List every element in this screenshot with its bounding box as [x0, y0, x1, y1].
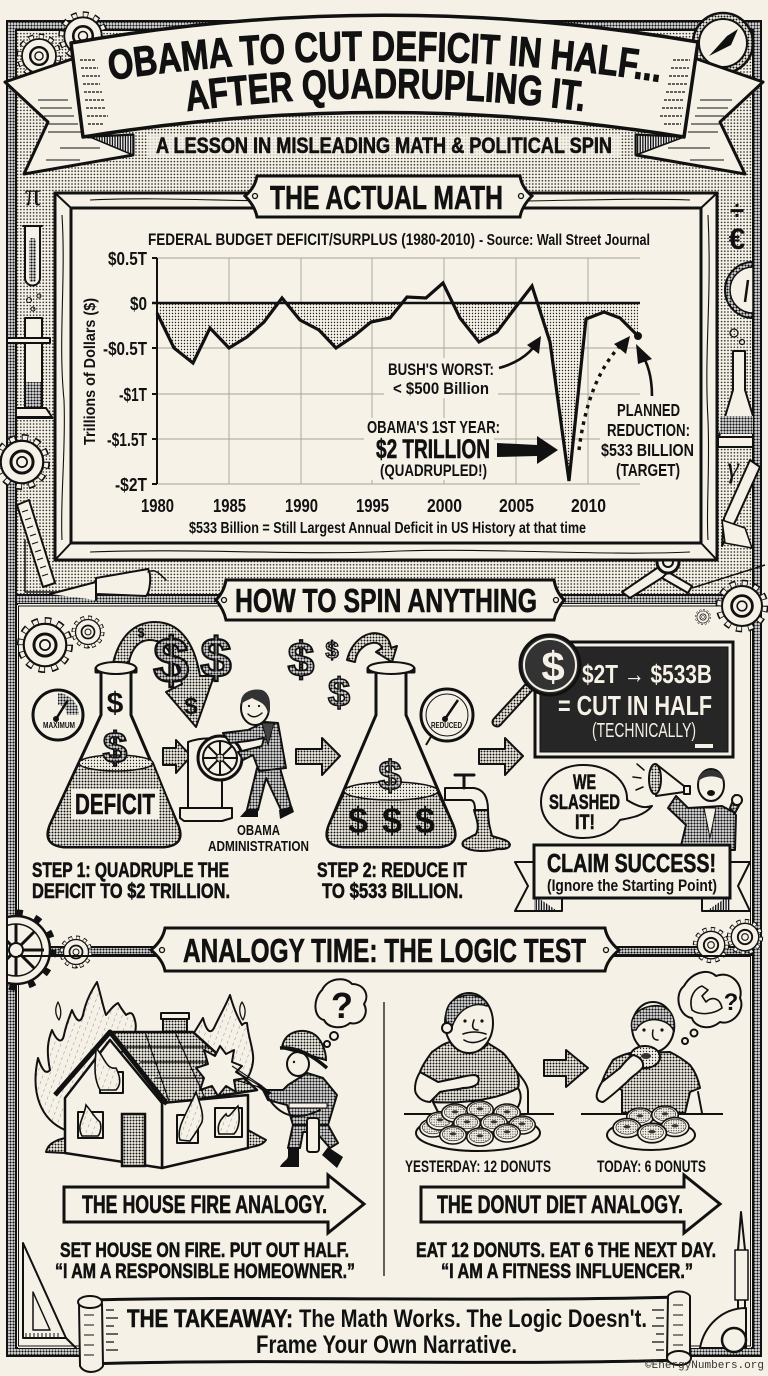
- donut diet caption: [416, 1239, 716, 1283]
- takeaway text: THE TAKEAWAY:: [127, 1305, 293, 1333]
- house fire caption: SET HOUSE ON FIRE. PUT OUT HALF.: [60, 1239, 349, 1262]
- y axis labels: -$1.5T: [107, 430, 147, 450]
- water spray lines: [232, 1066, 262, 1088]
- pi symbol: π: [25, 176, 41, 212]
- big corner gear wheel: [0, 913, 53, 987]
- arrow: the house fire analogy: THE HOUSE FIRE ANALOGY.: [82, 1191, 327, 1219]
- x axis labels: 1995: [356, 496, 389, 516]
- callout: obama's first year: OBAMA'S 1ST YEAR:: [367, 417, 500, 437]
- megaphone man: [633, 764, 742, 850]
- right scroll roll: [667, 1292, 691, 1365]
- y axis labels: [103, 249, 147, 495]
- half gear: [0, 439, 45, 485]
- flames right of house: [178, 995, 253, 1082]
- roof shingle lines: [125, 1032, 240, 1104]
- title line 1: OBAMA TO CUT DEFICIT IN HALF...: [108, 31, 660, 82]
- x axis labels: 2010: [571, 496, 606, 516]
- test tube: [23, 226, 42, 311]
- title line 2: AFTER QUADRUPLING IT.: [187, 68, 583, 112]
- banner main ribbon: [71, 15, 698, 137]
- decoration: right science column: [622, 195, 765, 628]
- side flask: [718, 329, 753, 447]
- tail hatching left: [38, 100, 100, 160]
- planned target dot: [634, 332, 642, 340]
- division sign: ÷: [730, 195, 744, 225]
- roof: [110, 1032, 257, 1104]
- y axis labels: -$0.5T: [103, 339, 147, 359]
- flying dollar signs left: $: [153, 624, 189, 696]
- pressure gauge: maximum: MAXIMUM: [43, 721, 75, 730]
- label: obama administration: [208, 822, 309, 855]
- test tool on shelf: [50, 569, 166, 600]
- house chimney: [161, 1013, 189, 1042]
- chart title: - Source: Wall Street Journal: [479, 232, 650, 249]
- bushes: [46, 1130, 266, 1153]
- callout: planned reduction: $533 BILLION: [601, 440, 694, 460]
- flying dollar signs left: $: [200, 626, 232, 689]
- house gable wall: [65, 1040, 162, 1168]
- house fire caption: “I AM A RESPONSIBLE HOMEOWNER.”: [55, 1260, 355, 1283]
- thought bubble with question mark: [315, 979, 366, 1047]
- callout: obama's first year: (QUADRUPLED!): [380, 461, 487, 480]
- claim success ribbon: [515, 845, 750, 911]
- step 1 text: STEP 1: QUADRUPLE THE: [32, 859, 229, 882]
- left scroll roll: [78, 1296, 103, 1372]
- y axis labels: -$2T: [115, 475, 147, 495]
- decoration: top left gears: [21, 16, 103, 74]
- flying dollar signs left: $: [184, 693, 198, 720]
- y axis title: Trillions of Dollars ($): [82, 298, 99, 445]
- y axis labels: $0.5T: [108, 249, 147, 269]
- side gauge: [725, 262, 753, 318]
- panel: donut diet analogy: [404, 972, 741, 1283]
- chalkboard: = CUT IN HALF: [558, 690, 712, 721]
- thin man eating: [597, 1002, 702, 1113]
- arrow: the donut diet analogy: [421, 1175, 720, 1233]
- ribbon hatching left: [80, 60, 108, 124]
- chalkboard: [535, 642, 733, 757]
- decoration: set square: [23, 1243, 76, 1348]
- step 2 text: TO $533 BILLION.: [322, 880, 463, 903]
- section heading: analogy time: ANALOGY TIME: THE LOGIC TEST: [183, 932, 586, 969]
- table line left: [404, 1113, 554, 1115]
- callout: planned reduction: REDUCTION:: [607, 420, 690, 440]
- title banner: [3, 14, 765, 176]
- valve pedestal: [180, 736, 242, 821]
- step 1 text: [32, 859, 230, 903]
- flask 2: reduced: $: [348, 800, 368, 841]
- decoration: left science column: [0, 176, 166, 600]
- water splash: [196, 1046, 246, 1096]
- speech bubble: we slashed it: IT!: [575, 811, 595, 834]
- banner left tail: [5, 58, 133, 174]
- x axis labels: 2005: [499, 496, 534, 516]
- x axis labels: 2000: [427, 496, 462, 516]
- donut labels: TODAY: 6 DONUTS: [597, 1158, 706, 1176]
- x axis labels: 1985: [213, 496, 246, 516]
- label: obama administration: ADMINISTRATION: [208, 838, 309, 855]
- callout: obama's first year: $2 TRILLION: [376, 434, 490, 464]
- takeaway scroll: [78, 1292, 691, 1372]
- drafting compass: [622, 551, 765, 598]
- section heading: analogy time: [0, 913, 760, 987]
- speech bubble: we slashed it: WE: [573, 771, 596, 794]
- arrow: the house fire analogy: [64, 1175, 364, 1233]
- gamma symbol: γ: [727, 451, 740, 484]
- claim success ribbon: CLAIM SUCCESS!: [547, 848, 716, 878]
- callout: planned reduction: [600, 344, 696, 480]
- label: obama administration: OBAMA: [237, 822, 280, 839]
- claim success ribbon: (Ignore the Starting Point): [547, 876, 717, 895]
- subtitle: A LESSON IN MISLEADING MATH & POLITICAL SPIN: [156, 133, 612, 158]
- table line right: [581, 1113, 723, 1115]
- flask 2: reduced: [327, 662, 455, 847]
- arrow to step 2: [296, 738, 340, 775]
- chart title: FEDERAL BUDGET DEFICIT/SURPLUS (1980-2010): [148, 230, 475, 249]
- takeaway message: The Math Works. The Logic Doesn't.: [299, 1305, 647, 1333]
- faucet and puddle: [445, 775, 510, 851]
- divider: [383, 1002, 385, 1276]
- stray flame licks: [56, 1002, 245, 1020]
- panel: house fire analogy: [36, 979, 366, 1283]
- callout: bush's worst: BUSH'S WORST:: [388, 360, 494, 379]
- euro sign: €: [729, 223, 746, 256]
- callout: bush's worst: [384, 336, 541, 398]
- pressure gauge: reduced: REDUCED: [431, 721, 462, 730]
- side gear: [720, 584, 764, 628]
- callout: planned reduction: PLANNED: [617, 400, 680, 420]
- section heading: the actual math: THE ACTUAL MATH: [270, 179, 503, 216]
- callout: planned reduction: (TARGET): [616, 460, 680, 480]
- flying dollar signs right: $: [288, 634, 315, 687]
- overweight man: [415, 993, 528, 1113]
- flying dollar signs left: [137, 624, 232, 720]
- zero line: [152, 302, 640, 304]
- pencil: [722, 460, 760, 548]
- windows with flames: [78, 1048, 242, 1143]
- section heading: how to spin anything: HOW TO SPIN ANYTHING: [235, 582, 537, 619]
- banner right tail: [636, 58, 763, 174]
- y axis labels: -$1T: [119, 385, 147, 405]
- curved arrow into flask 2: [347, 633, 397, 662]
- house fire caption: [55, 1239, 355, 1283]
- chalkboard: (TECHNICALLY): [592, 720, 696, 742]
- chalkboard: $2T → $533B: [582, 659, 712, 689]
- gears: [22, 618, 101, 668]
- flying dollar signs right: $: [325, 637, 339, 664]
- tiny gear: [697, 611, 709, 623]
- x axis labels: [141, 496, 606, 516]
- flames behind house: [36, 982, 136, 1130]
- grid lines: [157, 258, 640, 484]
- gray arrow into valve: [163, 740, 191, 773]
- magnifying glass: [497, 635, 580, 722]
- decoration: compass dial: [693, 13, 753, 73]
- pressure gauge: reduced: [421, 689, 473, 745]
- house right wall: [162, 1095, 248, 1168]
- banner fold shadow right: [636, 135, 684, 155]
- thought bubble with muscle: [678, 972, 741, 1044]
- speech bubble: we slashed it: [541, 765, 652, 838]
- panel: how to spin anything: [22, 618, 750, 911]
- takeaway closing line: Frame Your Own Narrative.: [256, 1331, 517, 1359]
- callout: bush's worst: < $500 Billion: [393, 379, 489, 398]
- gray arrow between men: [544, 1050, 588, 1087]
- x axis labels: 1990: [285, 496, 318, 516]
- speech bubble: we slashed it: SLASHED: [549, 791, 620, 814]
- decoration: pen and dial: [700, 1212, 748, 1352]
- callout: obama's first year: [364, 417, 558, 480]
- axes: [152, 258, 157, 484]
- flying dollar signs left: $: [137, 625, 145, 640]
- firefighter: [258, 1031, 343, 1168]
- step 2 text: STEP 2: REDUCE IT: [317, 859, 467, 882]
- chart footnote: $533 Billion = Still Largest Annual Deficit in US History at that time: [189, 520, 586, 537]
- y axis labels: $0: [130, 294, 147, 314]
- tail hatching right: [668, 100, 732, 160]
- pressure gauge: maximum: [33, 690, 83, 740]
- graduated cylinder: [7, 318, 53, 418]
- flask 1 curved pipe arrow: [112, 622, 214, 727]
- arrow to step 3: [479, 738, 523, 775]
- figure: obama administration: [223, 690, 294, 819]
- donut labels: YESTERDAY: 12 DONUTS: [405, 1158, 551, 1176]
- flask 1: deficit: DEFICIT: [75, 789, 155, 821]
- ruler: [17, 500, 60, 592]
- ribbon hatching right: [660, 60, 690, 124]
- flask 1: deficit: $: [107, 687, 124, 720]
- flying dollar signs right: $: [328, 671, 350, 715]
- flask 2: reduced: $: [378, 752, 402, 799]
- donut diet caption: “I AM A FITNESS INFLUENCER.”: [441, 1260, 693, 1283]
- dotted planned reduction arrow: [579, 336, 630, 450]
- flask 2: reduced: $: [415, 800, 435, 841]
- donut labels: [405, 1158, 706, 1176]
- deficit shaded area: [157, 303, 638, 481]
- step 1 text: DEFICIT TO $2 TRILLION.: [32, 880, 230, 903]
- roof edge: [55, 1032, 167, 1104]
- panel: chart frame: [55, 193, 717, 560]
- thought bubble with question mark: ?: [331, 985, 353, 1026]
- flask 1: deficit: $: [103, 724, 127, 773]
- plate with 6 donuts: [607, 1106, 695, 1150]
- flask 1: deficit: [48, 662, 180, 847]
- chart: federal budget deficit: [82, 230, 696, 537]
- step 2 text: [317, 859, 467, 903]
- door: [122, 1114, 145, 1166]
- x axis labels: 1980: [141, 496, 174, 516]
- plate with 12 donuts: [416, 1101, 540, 1151]
- magnifying glass: $: [541, 643, 565, 690]
- flask 2: reduced: $: [382, 800, 402, 841]
- watermark: ©EnergyNumbers.org: [645, 1360, 764, 1372]
- thought bubble with muscle: ?: [724, 989, 738, 1016]
- deficit line: [157, 283, 638, 481]
- flying dollar signs right: [288, 634, 350, 715]
- banner fold shadow left: [90, 135, 133, 155]
